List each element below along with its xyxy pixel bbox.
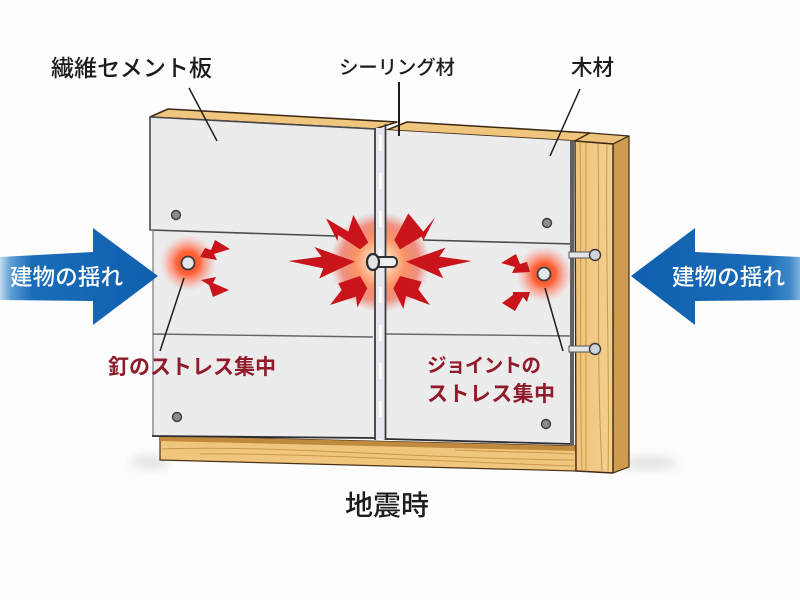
red stress arrows <box>288 213 472 309</box>
wood post <box>575 133 629 473</box>
arrow: left building shake <box>0 228 158 325</box>
label: left arrow: 建物の揺れ <box>10 265 123 290</box>
ground shadow <box>130 456 678 469</box>
stress burst: central joint <box>288 213 472 309</box>
board edges and seams <box>150 117 574 445</box>
small arrows <box>501 254 530 311</box>
arrow: right building shake <box>631 228 800 325</box>
stress point: right nail <box>501 246 572 311</box>
top wood beam <box>150 109 590 141</box>
sealing strip <box>375 124 386 440</box>
left board <box>150 117 375 438</box>
label: sealing material: シーリング材 <box>339 57 455 79</box>
bottom wood beam <box>160 436 576 471</box>
small screws <box>172 210 552 428</box>
small arrows <box>200 240 230 297</box>
label: wood: 木材 <box>571 56 614 80</box>
leader lines <box>160 82 580 351</box>
bolts into post <box>569 250 600 354</box>
fiber cement boards <box>150 117 574 445</box>
right board <box>386 130 574 445</box>
label: joint stress concentration: ジョイントの <box>427 355 541 377</box>
wood frame <box>150 109 629 473</box>
label: joint stress concentration <box>427 355 555 406</box>
label: right arrow: 建物の揺れ <box>672 265 785 290</box>
label: fiber cement board: 繊維セメント板 <box>51 55 212 81</box>
caption: during earthquake: 地震時 <box>345 490 429 521</box>
label: joint stress concentration: ストレス集中 <box>427 383 555 406</box>
stress glow: central joint <box>330 212 430 312</box>
center nail <box>367 254 397 270</box>
label: nail stress concentration: 釘のストレス集中 <box>108 356 276 379</box>
stress point: left nail <box>160 235 230 297</box>
